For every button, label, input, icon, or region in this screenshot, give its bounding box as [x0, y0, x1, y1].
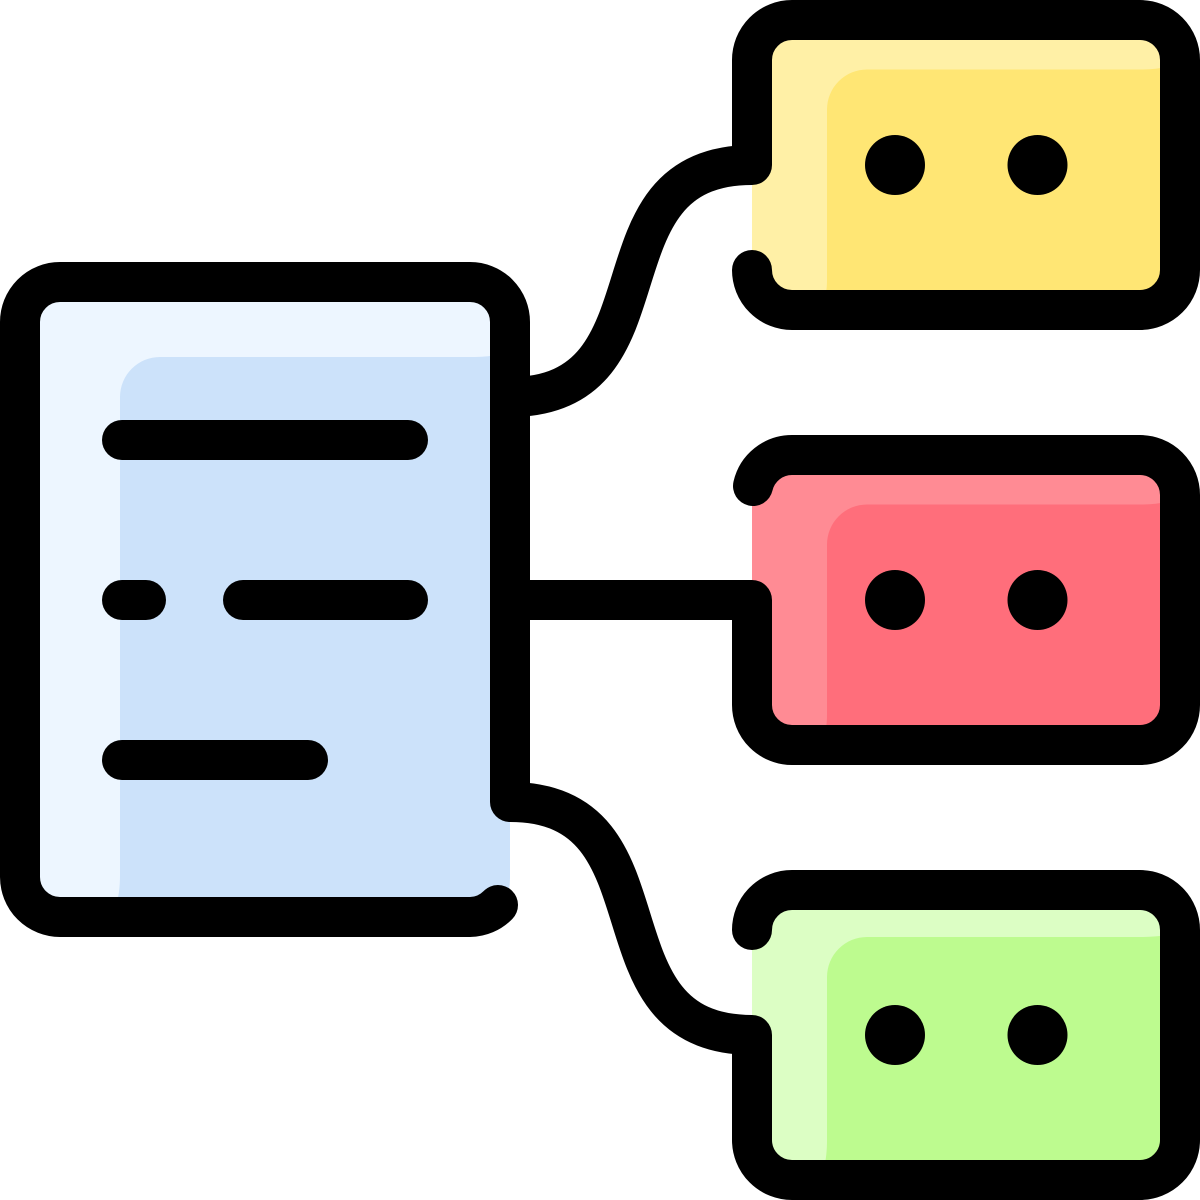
text line: first	[122, 420, 408, 460]
icon: right dot	[1008, 1005, 1068, 1065]
icon: left dot	[865, 1005, 925, 1065]
panel: green card	[752, 890, 1180, 1180]
icon: right dot	[1008, 135, 1068, 195]
panel: yellow card	[752, 20, 1180, 310]
panel: red card	[752, 455, 1180, 745]
panel: blue document	[20, 282, 510, 917]
text line: short dash	[122, 580, 146, 620]
icon: left dot	[865, 570, 925, 630]
text line: third	[122, 740, 308, 780]
icon: right dot	[1008, 570, 1068, 630]
icon: left dot	[865, 135, 925, 195]
text line: second	[243, 580, 408, 620]
arrow: connector to green card	[510, 802, 752, 1035]
arrow: connector to yellow card	[510, 165, 752, 397]
arrow: connector to red card	[510, 580, 752, 620]
